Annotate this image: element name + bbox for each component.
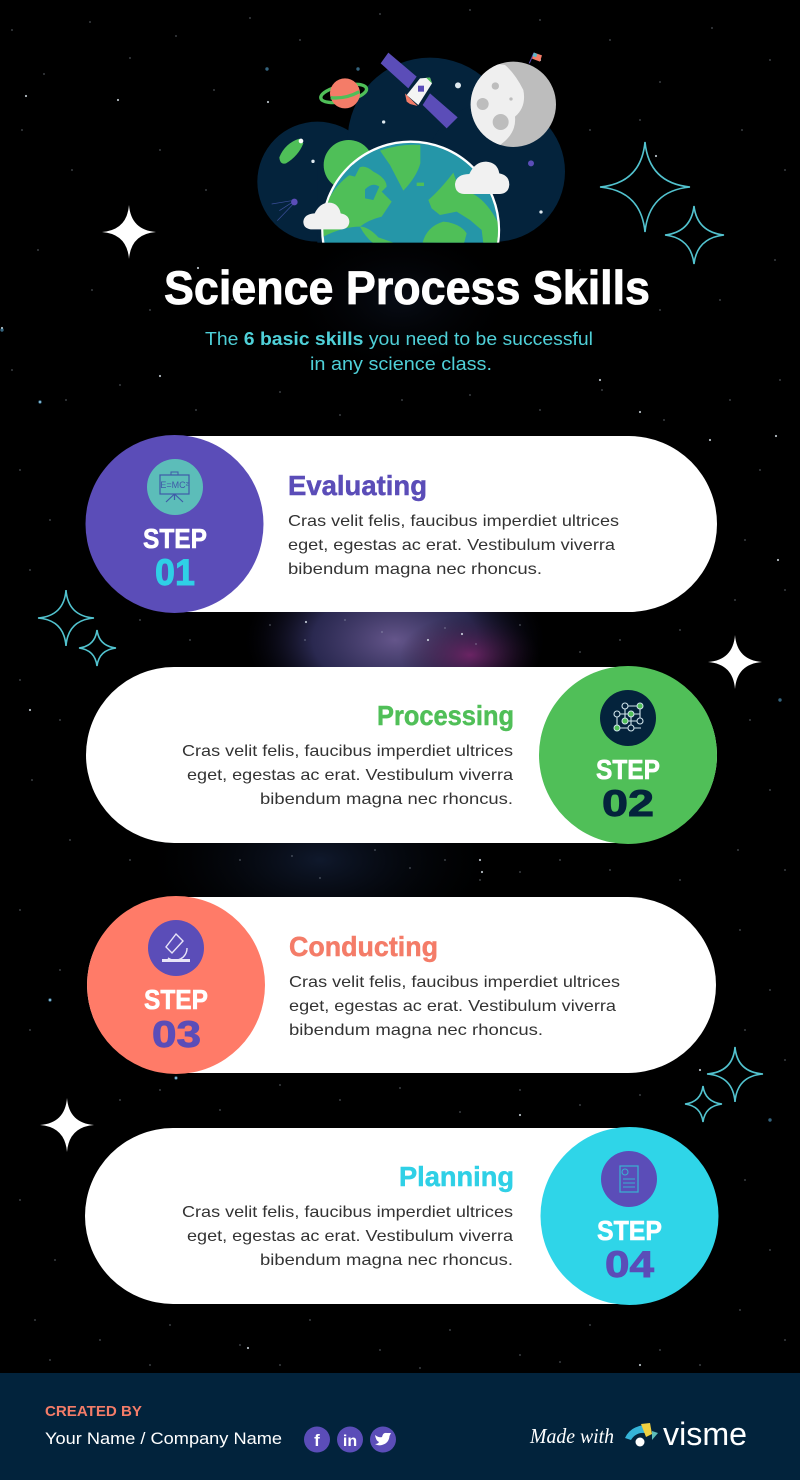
icon: cloud right bbox=[455, 162, 509, 194]
icon: flag bbox=[529, 53, 542, 63]
icon: blackboard formula: E=MC² bbox=[160, 480, 189, 490]
icon: satellite bbox=[381, 53, 458, 128]
panel: step 03 conducting: STEP bbox=[144, 984, 208, 1015]
subtitle: The 6 basic skills you need to be successful bbox=[205, 328, 593, 349]
subtitle bbox=[205, 328, 593, 374]
panel: step 01 evaluating bbox=[86, 435, 717, 613]
stars on backdrop bbox=[311, 82, 543, 214]
panel: step 04 planning: 04 bbox=[605, 1244, 655, 1285]
panel: step 03 conducting: Cras velit felis, faucibus imperdiet ultrices bbox=[289, 974, 620, 991]
sparkle: teal outline stars bbox=[38, 142, 763, 1122]
icon: blackboard formula bbox=[147, 459, 203, 515]
panel: step 01 evaluating: Cras velit felis, faucibus imperdiet ultrices bbox=[288, 513, 619, 530]
panel: step 03 conducting: eget, egestas ac erat. Vestibulum viverra bbox=[289, 998, 616, 1015]
icon: linkedin: in bbox=[343, 1433, 357, 1450]
icon: comet bbox=[279, 139, 303, 164]
hero illustration: space scene with earth bbox=[257, 52, 565, 243]
panel: step 04 planning bbox=[85, 1127, 718, 1305]
icon: connected nodes bbox=[600, 690, 656, 746]
panel: step 01 evaluating: bibendum magna nec rhoncus. bbox=[288, 561, 542, 578]
panel: step 01 evaluating: eget, egestas ac erat. Vestibulum viverra bbox=[288, 537, 615, 554]
icon: facebook: f bbox=[314, 1431, 320, 1450]
icon: visme logo bbox=[625, 1423, 658, 1446]
footer bbox=[0, 1373, 800, 1480]
icon: cloud left bbox=[303, 203, 349, 229]
panel: step 01 evaluating: 01 bbox=[155, 552, 195, 593]
icon: twitter bbox=[370, 1426, 396, 1452]
panel: step 02 processing: Processing bbox=[377, 700, 514, 731]
author name: Your Name / Company Name bbox=[45, 1430, 282, 1448]
icon: microscope bbox=[148, 920, 204, 976]
made with: Made with bbox=[529, 1424, 614, 1448]
icon: earth bbox=[321, 140, 500, 243]
panel: step 01 evaluating: STEP bbox=[143, 523, 207, 554]
panel: step 02 processing: STEP bbox=[596, 754, 660, 785]
created by label: CREATED BY bbox=[45, 1403, 142, 1420]
icon: sputnik bbox=[272, 199, 298, 221]
panel: step 02 processing: bibendum magna nec rhoncus. bbox=[260, 791, 513, 808]
subtitle: in any science class. bbox=[310, 353, 492, 374]
panel: step 02 processing: 02 bbox=[602, 783, 654, 824]
panel: step 04 planning: Cras velit felis, faucibus imperdiet ultrices bbox=[182, 1204, 513, 1221]
panel: step 04 planning: STEP bbox=[597, 1215, 662, 1246]
cloud-shaped backdrop bbox=[257, 58, 565, 243]
panel: step 02 processing bbox=[86, 666, 717, 844]
panel: step 01 evaluating: Evaluating bbox=[288, 470, 427, 501]
icon: facebook bbox=[304, 1426, 330, 1452]
icon: planet with ring bbox=[319, 78, 368, 108]
panel: step 03 conducting bbox=[87, 896, 716, 1074]
icon: document bbox=[601, 1151, 657, 1207]
panel: step 04 planning: Planning bbox=[399, 1161, 514, 1192]
panel: step 03 conducting: 03 bbox=[152, 1014, 201, 1055]
icon: linkedin bbox=[337, 1426, 363, 1452]
panel: step 03 conducting: Conducting bbox=[289, 931, 438, 962]
panel: step 02 processing: eget, egestas ac erat. Vestibulum viverra bbox=[187, 767, 513, 784]
panel: step 04 planning: bibendum magna nec rhoncus. bbox=[260, 1252, 513, 1269]
visme wordmark: visme bbox=[663, 1416, 747, 1452]
title: Science Process Skills bbox=[164, 261, 650, 314]
panel: step 04 planning: eget, egestas ac erat. Vestibulum viverra bbox=[187, 1228, 513, 1245]
sparkle: white stars bbox=[40, 205, 762, 1152]
icon: moon bbox=[467, 60, 556, 150]
panel: step 03 conducting: bibendum magna nec rhoncus. bbox=[289, 1022, 543, 1039]
panel: step 02 processing: Cras velit felis, faucibus imperdiet ultrices bbox=[182, 743, 513, 760]
